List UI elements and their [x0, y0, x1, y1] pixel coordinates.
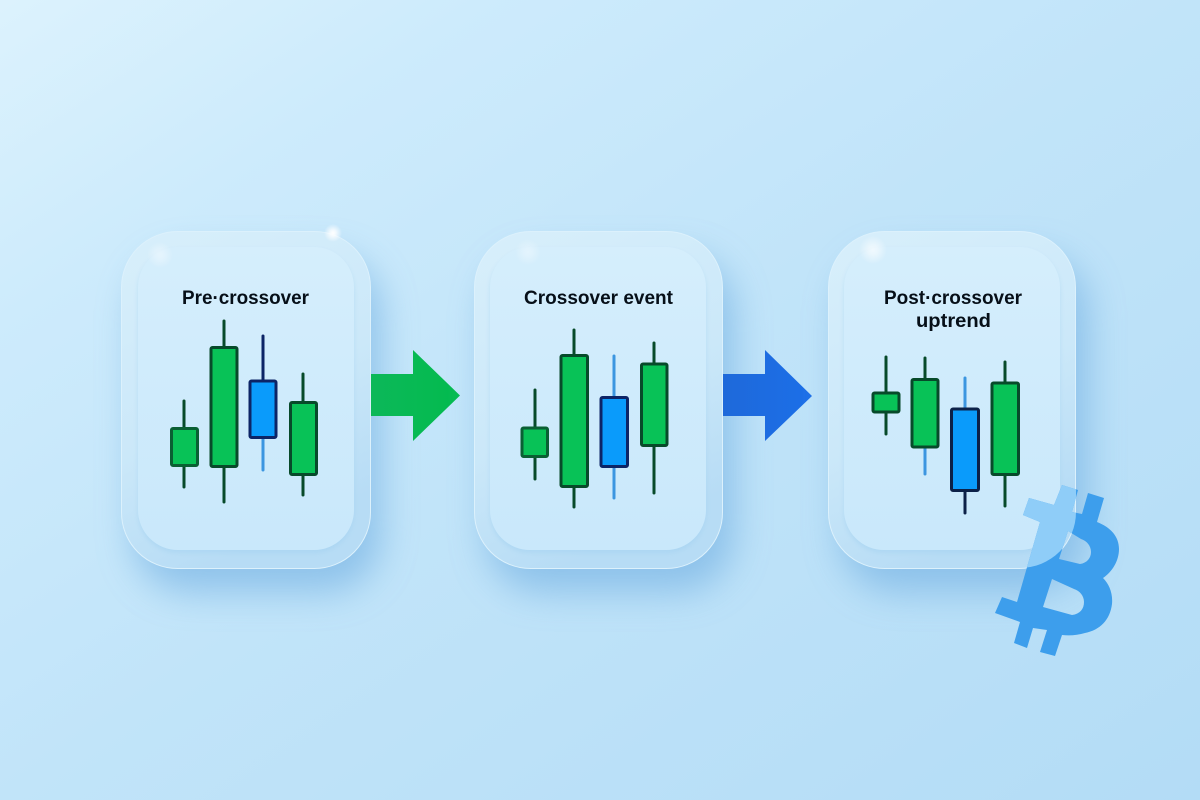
candlestick chart: pre-crossover — [172, 321, 316, 502]
candlestick chart: post-crossover — [873, 357, 1018, 513]
panel: pre-crossover — [122, 224, 381, 592]
candlestick chart: crossover event — [522, 330, 667, 507]
arrow: blue — [723, 350, 812, 441]
heading: Pre-crossover: Pre·crossover — [182, 288, 310, 309]
icon: glint — [859, 236, 887, 264]
icon: glint top right — [324, 224, 342, 242]
arrow: green — [371, 350, 460, 441]
heading: Post-crossover uptrend — [884, 288, 1023, 332]
icon: bitcoin symbol — [995, 485, 1119, 656]
panel: post-crossover uptrend — [828, 232, 1088, 592]
heading: Post-crossover uptrend: uptrend — [916, 311, 991, 332]
heading: Crossover event: Crossover event — [524, 288, 674, 309]
icon: glint — [515, 239, 541, 265]
icon: glint top left — [147, 242, 173, 268]
heading: Post-crossover uptrend: Post·crossover — [884, 288, 1023, 309]
panel: crossover event — [474, 232, 734, 592]
